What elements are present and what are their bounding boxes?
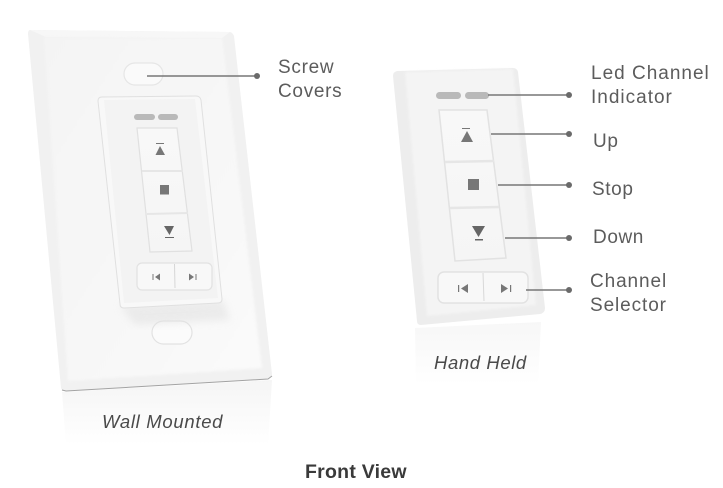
channel buttons [137, 263, 212, 290]
leader: screw covers [147, 73, 260, 79]
icon: down [164, 226, 174, 238]
icon: stop [160, 185, 169, 194]
screw cover: bottom [152, 321, 192, 344]
keypad module [98, 96, 222, 308]
screw cover: top [124, 63, 163, 85]
label: Up: Up [593, 131, 618, 152]
hand held remote [393, 68, 545, 385]
channel buttons [438, 272, 528, 303]
icon: up [461, 128, 473, 142]
icon: next [189, 274, 196, 280]
label: Led Channel Indicator: Led Channel [591, 63, 710, 84]
wall mounted remote [28, 30, 272, 445]
button column [439, 110, 506, 261]
label: Led Channel Indicator: Indicator [591, 87, 673, 108]
label: Screw Covers: Covers [278, 81, 342, 102]
label: Stop: Stop [592, 179, 634, 200]
wall plate reflection [62, 380, 272, 445]
hand held body [393, 68, 545, 325]
icon: stop [468, 179, 479, 190]
hand held reflection [415, 322, 541, 385]
leader: led channel indicator [488, 92, 572, 98]
label: Down: Down [593, 227, 644, 248]
LED indicators [436, 92, 489, 99]
label: Channel Selector: Channel [590, 271, 667, 292]
LED indicators [134, 114, 178, 120]
button column [137, 128, 192, 252]
leader: stop [498, 182, 572, 188]
title: Front View: Front View [305, 461, 407, 483]
icon: up [156, 143, 165, 155]
caption: Wall Mounted: Wall Mounted [102, 411, 223, 432]
keypad shadow [120, 300, 230, 325]
icon: down [472, 226, 485, 240]
leader: up [491, 131, 572, 137]
icon: previous [152, 274, 160, 280]
wall plate [28, 30, 272, 391]
icon: next [501, 284, 511, 293]
caption: Hand Held: Hand Held [434, 352, 527, 373]
label: Channel Selector: Selector [590, 295, 667, 316]
leader: channel selector [526, 287, 572, 293]
leader lines [147, 73, 572, 293]
icon: previous [458, 284, 468, 293]
leader: down [505, 235, 572, 241]
label: Screw Covers: Screw [278, 57, 334, 78]
